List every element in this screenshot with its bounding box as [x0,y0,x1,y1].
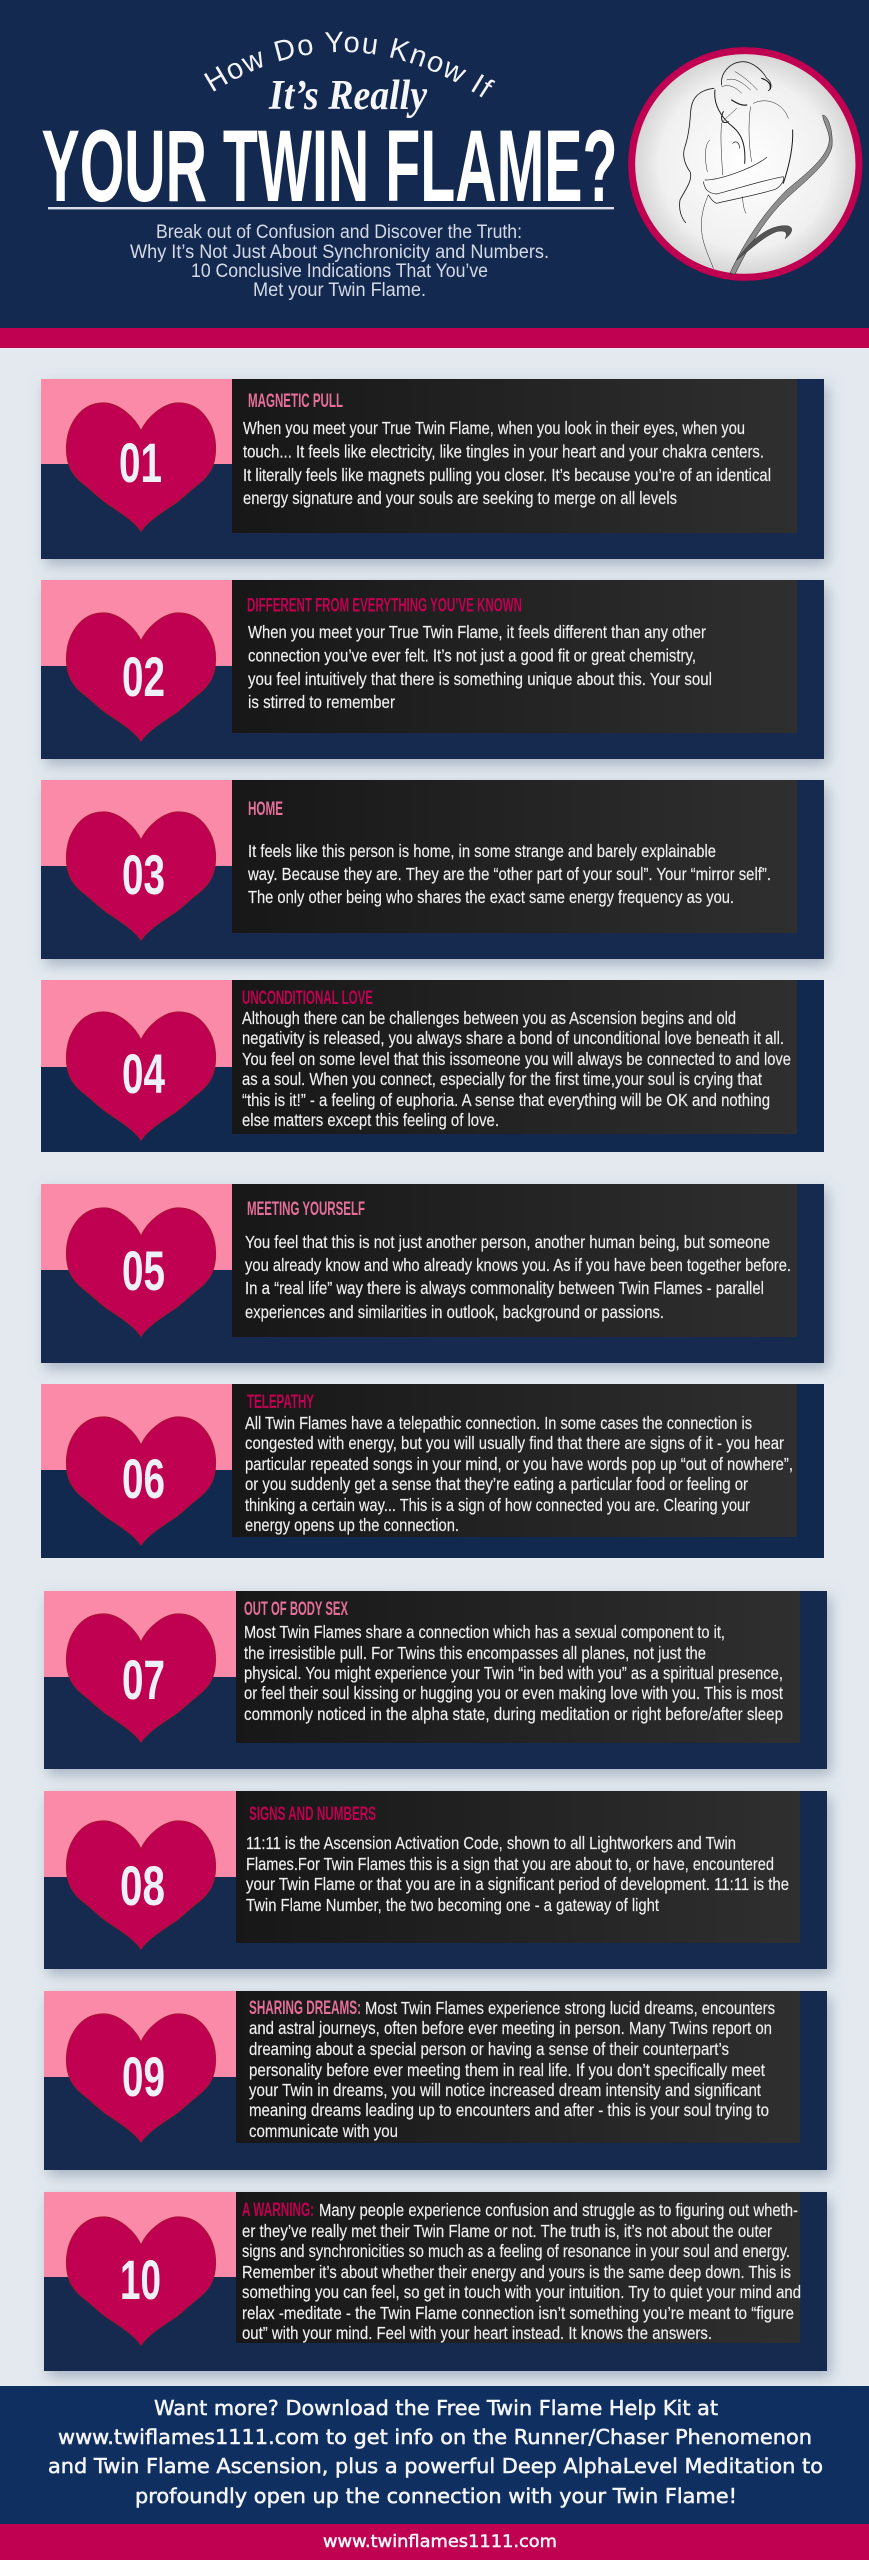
heading 03: HOME [248,798,283,820]
text 06: energy opens up the connection. [245,1515,459,1535]
text 05: In a “real life” way there is always commonality between Twin Flames - parallel [245,1278,764,1298]
text 09: dreaming about a special person or having a sense of their counterpart’s [249,2039,729,2059]
text 07: Most Twin Flames share a connection which has a sexual component to it, [244,1622,725,1642]
heading 06: TELEPATHY [247,1391,314,1413]
text 08: your Twin Flame or that you are in a significant period of development. 11:11 is the [246,1874,789,1894]
text 10: er they’ve really met their Twin Flame or not. The truth is, it’s not about the outer [242,2221,772,2241]
text 09: communicate with you [249,2121,398,2141]
text 06 [245,1413,793,1535]
text 05: experiences and similarities in outlook, background or passions. [245,1302,664,1322]
icon: heart 06 [66,1417,216,1545]
subtitle: Break out of Confusion and Discover the Truth: [156,222,522,243]
text 06: thinking a certain way... This is a sign of how connected you are. Clearing your [245,1495,750,1515]
number 05: 05 [122,1239,165,1302]
number 04: 04 [122,1042,165,1105]
text 04: “this is it!” - a feeling of euphoria. A sense that everything will be OK and nothing [242,1090,770,1110]
number 08: 08 [120,1854,165,1917]
footer website bar: www.twinflames1111.com [323,2532,557,2552]
number 02: 02 [122,645,165,708]
text 02 [248,622,712,712]
heading 02: DIFFERENT FROM EVERYTHING YOU’VE KNOWN [247,595,522,617]
heading 01: MAGNETIC PULL [248,390,343,412]
panel: 03 home [41,780,824,959]
text 07 [244,1622,783,1724]
number 09: 09 [122,2045,165,2108]
footer call to action: and Twin Flame Ascension, plus a powerful Deep AlphaLevel Meditation to [48,2454,823,2478]
panel: 04 unconditional love [41,980,824,1152]
footer call to action: Want more? Download the Free Twin Flame Help Kit at [154,2396,718,2420]
text 08 [246,1833,789,1915]
text 01: touch... It feels like electricity, like tingles in your heart and your chakra centers. [243,442,764,462]
number 07: 07 [122,1648,165,1711]
text 02: is stirred to remember [248,692,395,712]
icon: embracing couple in circle [632,51,859,277]
heading 09: SHARING DREAMS: [249,1997,361,2019]
heading 07: OUT OF BODY SEX [244,1598,348,1620]
text 05 [245,1232,791,1322]
text 06: All Twin Flames have a telepathic connection. In some cases the connection is [245,1413,752,1433]
footer call to action [0,2386,869,2524]
text 01 [243,418,771,508]
text 01: When you meet your True Twin Flame, when you look in their eyes, when you [243,418,745,438]
footer call to action: www.twiflames1111.com to get info on the Runner/Chaser Phenomenon [58,2425,812,2449]
text 02: connection you’ve ever felt. It’s not just a good fit or great chemistry, [248,646,696,666]
text 09 [249,1998,775,2141]
text 04: Although there can be challenges between you as Ascension begins and old [242,1008,736,1028]
icon: heart 02 [66,613,216,741]
number 03: 03 [122,843,165,906]
text 09: your Twin in dreams, you will notice increased dream intensity and significant [249,2080,761,2100]
number 01: 01 [119,431,162,494]
heading 10: A WARNING: [242,2199,314,2221]
subtitle [130,222,549,301]
text 10: relax -meditate - the Twin Flame connection isn’t something you’re meant to “figure [242,2303,794,2323]
icon: heart 08 [66,1821,216,1949]
icon: heart 07 [66,1614,216,1742]
icon: heart 01 [66,403,216,531]
panel: 09 sharing dreams [44,1991,827,2170]
text 10 [242,2200,801,2343]
text 02: you feel intuitively that there is something unique about this. Your soul [248,669,712,689]
text 04: negativity is released, you always share a bond of unconditional love beneath it all. [242,1028,784,1048]
text 04: as a soul. When you connect, especially for the first time,your soul is crying that [242,1069,762,1089]
text 08: Flames.For Twin Flames this is a sign that you are about to, or have, encountered [246,1854,774,1874]
text 03: way. Because they are. They are the “other part of your soul”. Your “mirror self”. [247,864,771,884]
text 03: It feels like this person is home, in some strange and barely explainable [248,841,716,861]
text 01: It literally feels like magnets pulling you closer. It’s because you’re of an identical [243,465,771,485]
text 01: energy signature and your souls are seeking to merge on all levels [243,488,677,508]
text 08: 11:11 is the Ascension Activation Code, shown to all Lightworkers and Twin [246,1833,736,1853]
text 09: Most Twin Flames experience strong lucid dreams, encounters [365,1998,775,2018]
icon: heart 05 [66,1208,216,1336]
panel: 06 telepathy [41,1384,824,1558]
icon: heart 10 [66,2217,216,2345]
text 03 [247,841,771,907]
text 06: or you suddenly get a sense that they’re eating a particular food or feeling or [245,1474,748,1494]
text 07: physical. You might experience your Twin “in bed with you” as a spiritual presence, [244,1663,783,1683]
footer call to action: profoundly open up the connection with your Twin Flame! [135,2484,737,2508]
footer website bar [0,2524,869,2560]
text 10: Many people experience confusion and struggle as to figuring out wheth- [319,2200,798,2220]
heading 04: UNCONDITIONAL LOVE [242,987,373,1009]
header band [0,0,869,348]
icon: heart 04 [66,1012,216,1140]
subtitle: Met your Twin Flame. [253,280,426,301]
text 09: and astral journeys, often before ever meeting in person. Many Twins report on [249,2018,772,2038]
title underline [48,207,614,209]
title: it's really: It’s Really [268,73,427,119]
heading 05: MEETING YOURSELF [247,1198,365,1220]
panel: 02 different from everything [41,580,824,759]
panel: 05 meeting yourself [41,1184,824,1363]
text 07: the irresistible pull. For Twins this encompasses all planes, not just the [244,1643,706,1663]
text 07: commonly noticed in the alpha state, during meditation or right before/after sleep [244,1704,783,1724]
panel: 10 a warning [44,2192,827,2371]
subtitle: 10 Conclusive Indications That You’ve [191,261,488,282]
text 02: When you meet your True Twin Flame, it feels different than any other [248,622,706,642]
icon: heart 09 [66,2014,216,2142]
text 05: You feel that this is not just another person, another human being, but someone [245,1232,770,1252]
panel: 01 magnetic pull [41,379,824,559]
text 03: The only other being who shares the exact same energy frequency as you. [248,887,734,907]
subtitle: Why It’s Not Just About Synchronicity and Numbers. [130,242,549,263]
number 06: 06 [122,1447,165,1510]
text 04: else matters except this feeling of love. [242,1110,499,1130]
panel: 07 out of body sex [44,1591,827,1769]
text 09: personality before ever meeting them in real life. If you don’t specifically meet [249,2060,765,2080]
text 07: or feel their soul kissing or hugging you or even making love with you. This is most [244,1683,783,1703]
text 09: meaning dreams leading up to encounters and after - this is your soul trying to [249,2100,769,2120]
text 04 [242,1008,791,1130]
title: how do you know if: How Do You Know If [204,32,496,98]
text 08: Twin Flame Number, the two becoming one - a gateway of light [246,1895,659,1915]
heading 08: SIGNS AND NUMBERS [249,1803,376,1825]
icon: heart 03 [66,812,216,940]
panel: 08 signs and numbers [44,1791,827,1969]
number 10: 10 [120,2248,161,2311]
text 06: congested with energy, but you will usually find that there are signs of it - you hear [245,1433,784,1453]
text 10: out” with your mind. Feel with your heart instead. It knows the answers. [242,2323,712,2343]
